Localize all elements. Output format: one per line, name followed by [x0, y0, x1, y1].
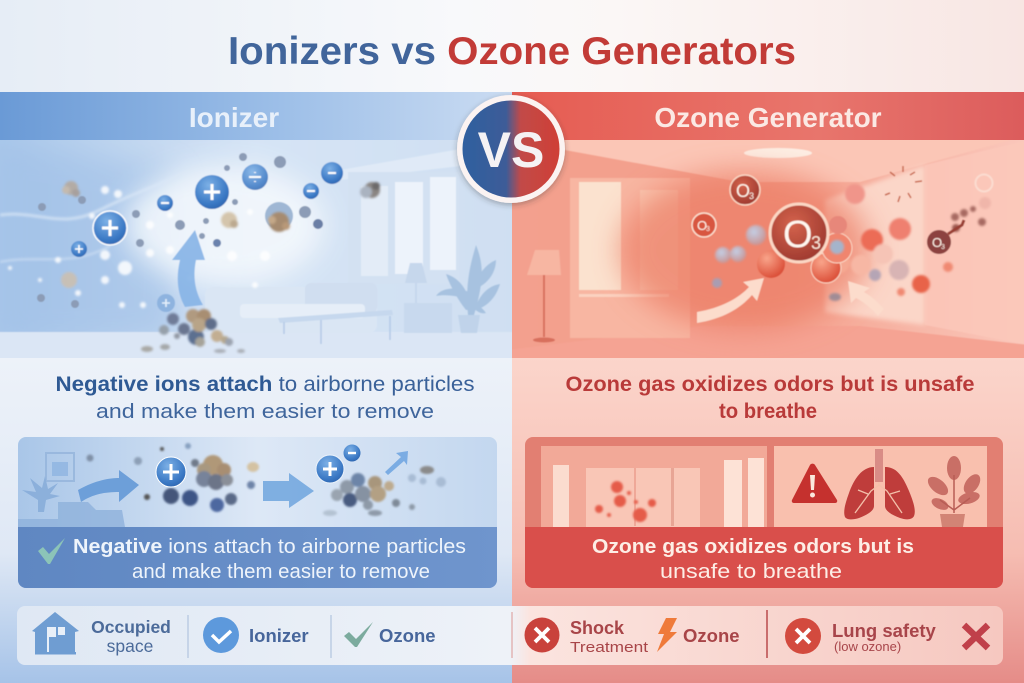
- scene: room with odor cloud: [541, 446, 767, 527]
- label: shock treatment: Shock: [570, 618, 625, 638]
- ion: minus far right: [321, 162, 343, 184]
- ion: small minus left: [157, 195, 173, 211]
- molecules: [712, 184, 991, 301]
- description: ozone generator: [566, 372, 975, 423]
- caption bar: [18, 527, 497, 588]
- ion: divide: [242, 164, 268, 190]
- dust pile: [141, 309, 245, 353]
- icon: lightning bolt: [657, 618, 677, 652]
- O3 bubble: top: [730, 175, 760, 205]
- dust clumps: [61, 181, 380, 288]
- icon: potted plant: [925, 456, 984, 527]
- label: occupied space: [91, 617, 171, 656]
- icon: blue check badge: [203, 617, 239, 653]
- O3 bubble: right: 3: [941, 244, 945, 251]
- O3 bubble: large: O: [783, 214, 813, 256]
- icon: red x badge 2: [785, 618, 821, 654]
- ion: faint plus: [157, 294, 175, 312]
- spark burst: [885, 166, 922, 202]
- icon: check mark: [38, 538, 65, 564]
- description: ionizer: and make them easier to remove: [96, 400, 434, 423]
- O3 bubble: top: 3: [749, 191, 754, 201]
- label: lung safety: [832, 620, 937, 654]
- icon: green check: [344, 622, 373, 647]
- O3 bubble: left: [692, 213, 716, 237]
- caption text: and make them easier to remove: [132, 560, 430, 583]
- room: wall and floor: [0, 140, 517, 362]
- label: lung safety: (low ozone): [834, 639, 901, 654]
- strip dividers: [188, 610, 767, 658]
- caption text: [592, 535, 914, 583]
- molecule: orange spheres around O3: [757, 216, 852, 283]
- panel: ozone detail card: [525, 437, 1003, 588]
- VS badge: VS: [478, 122, 544, 178]
- room: plant: [436, 245, 500, 333]
- O3 bubble: large: 3: [811, 233, 821, 253]
- cluster: first particle group: [86, 443, 259, 512]
- arrow: up-right: [385, 451, 408, 475]
- O3 bubble: large: [770, 204, 828, 262]
- panel: ionizer scene: [0, 135, 517, 363]
- ozone haze: [620, 170, 870, 330]
- icon: house: [32, 612, 79, 654]
- room: window: [348, 172, 456, 276]
- panel header: ionizer: [0, 92, 512, 140]
- room: lamp: [404, 263, 452, 333]
- title: Ionizers vs Ozone Generators: [228, 30, 796, 73]
- ion: large plus: [93, 211, 127, 245]
- description: ozone generator: Ozone gas oxidizes odors but is unsafe: [566, 372, 975, 396]
- ceiling and floor: [564, 140, 1024, 358]
- label: ozone (shock): Ozone: [683, 625, 740, 646]
- description: ionizer: Negative ions attach to airborne particles: [56, 372, 474, 396]
- panel: ionizer detail card: [18, 437, 497, 588]
- label: lung safety: Lung safety: [832, 620, 937, 641]
- O3 bubble: left: 3: [706, 226, 710, 233]
- faint ring: [976, 174, 992, 192]
- heading: Ozone Generator: Ozone Generator: [654, 102, 882, 133]
- scene: room silhouette: [18, 453, 125, 527]
- curved arrows pointing inward: [697, 278, 884, 323]
- label: shock treatment: [570, 618, 649, 656]
- air stream and particles: [0, 153, 323, 308]
- VS badge: [457, 95, 565, 203]
- ion: plus 2: [316, 455, 344, 483]
- icon: warning triangle: [792, 464, 837, 503]
- O3 bubble: left: O: [697, 218, 707, 233]
- icon: lungs: [844, 449, 915, 519]
- caption bar: [525, 527, 1003, 588]
- panel: ozone scene: [507, 135, 1024, 363]
- ion: minus: [344, 444, 360, 462]
- O3 bubble: right: [927, 220, 964, 254]
- icon: red x badge 1: [524, 618, 560, 652]
- caption text: Ozone gas oxidizes odors but is: [592, 535, 914, 558]
- panel header: ozone generator: [512, 92, 1024, 140]
- ion: small minus right: [303, 183, 319, 199]
- window left: [570, 178, 690, 338]
- room: sofa and table: [206, 298, 392, 344]
- caption text: unsafe to breathe: [660, 560, 842, 583]
- description: ozone generator: to breathe: [719, 399, 817, 423]
- caption text: Negative ions attach to airborne particles: [73, 535, 466, 558]
- comparison strip: [17, 606, 1003, 665]
- upward arrow: [172, 230, 205, 307]
- arrow: first flow: [78, 470, 139, 502]
- scene: warning panel background: [774, 446, 987, 527]
- ion: top plus: [195, 175, 229, 209]
- description: ionizer: [56, 372, 474, 423]
- heading: Ionizer: Ionizer: [189, 102, 279, 133]
- ions: [71, 162, 343, 312]
- O3 bubble: top: O: [736, 181, 750, 201]
- label: occupied space: space: [107, 636, 153, 656]
- label: shock treatment: Treatment: [570, 639, 649, 656]
- floor lamp: [527, 250, 561, 342]
- caption text: [73, 535, 466, 583]
- bright right wall: [824, 158, 966, 331]
- label: ionizer: Ionizer: [249, 625, 309, 646]
- arrow: second flow: [263, 473, 314, 508]
- cluster: second particle group: [323, 466, 446, 516]
- icon: red x: [964, 625, 988, 648]
- ion: plus 1: [156, 457, 186, 487]
- label: ozone: Ozone: [379, 625, 436, 646]
- label: occupied space: Occupied: [91, 617, 171, 637]
- O3 bubble: right: O: [932, 235, 942, 250]
- ion: small plus: [71, 241, 87, 257]
